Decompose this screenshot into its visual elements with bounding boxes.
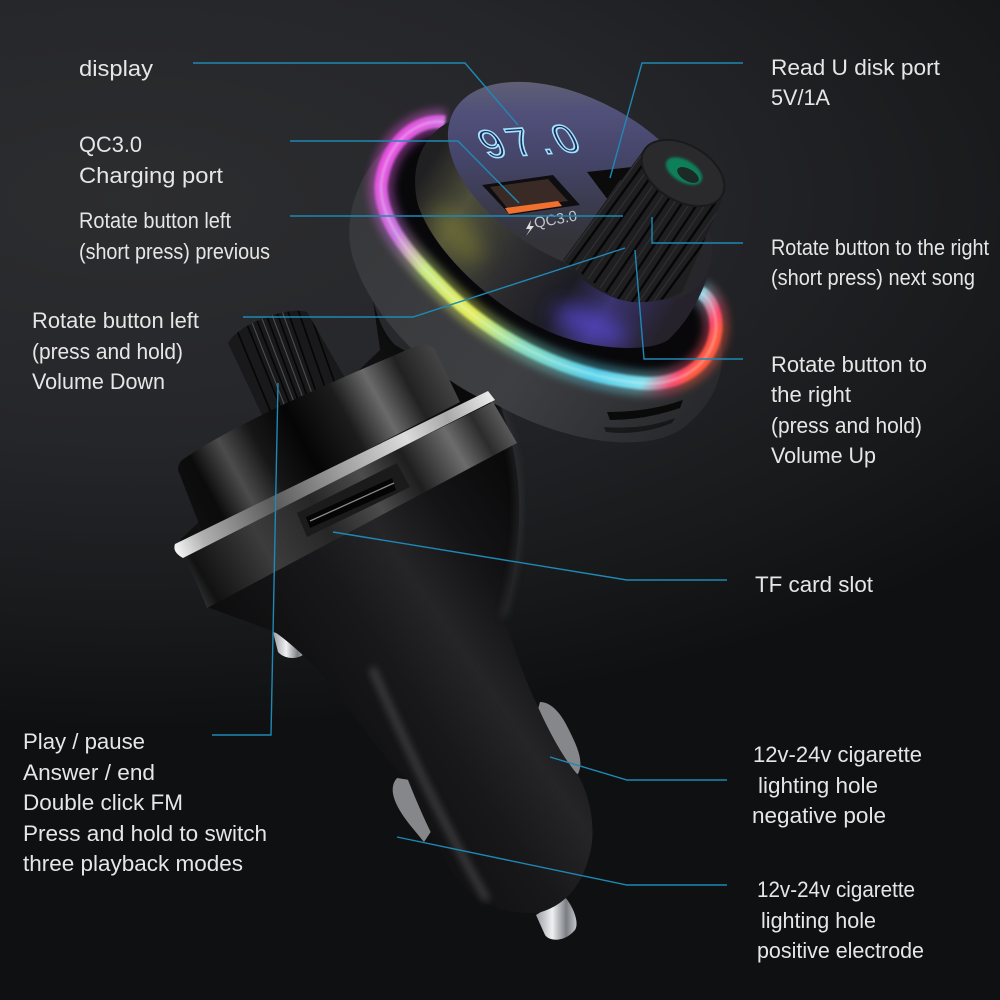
label: read u disk port bbox=[771, 55, 940, 110]
knob skirt bbox=[563, 180, 712, 300]
label: rotate button right hold bbox=[771, 352, 927, 468]
plug tip bbox=[536, 897, 577, 940]
rgb light ring bbox=[381, 122, 716, 383]
label: positive electrode: positive electrode bbox=[757, 938, 924, 963]
label: play pause bbox=[23, 729, 267, 876]
label: rotate button left hold: Rotate button left bbox=[32, 308, 199, 333]
illustration: lower charger head bbox=[174, 302, 517, 608]
label: rotate button right short press: (short press) next song bbox=[771, 265, 975, 290]
neck highlight bbox=[500, 408, 519, 617]
line: rotate right short bbox=[652, 217, 743, 243]
illustration: upper charger head bbox=[350, 82, 734, 442]
label: play pause: Double click FM bbox=[23, 790, 183, 815]
plug shell and neck bbox=[180, 300, 593, 913]
knob green icon bbox=[661, 151, 707, 191]
inner cylinder bbox=[415, 100, 712, 348]
side contact left bbox=[273, 632, 306, 658]
label: negative pole: 12v-24v cigarette bbox=[753, 742, 922, 767]
lower drum base bbox=[185, 402, 517, 608]
label: positive electrode: lighting hole bbox=[761, 908, 876, 933]
violet glow on cylinder bbox=[424, 199, 632, 351]
label: rotate button right hold: the right bbox=[771, 382, 851, 407]
line: negative pole bbox=[550, 757, 727, 780]
usb side slots bbox=[604, 400, 683, 433]
line: display bbox=[193, 63, 518, 125]
label: rotate button right hold: Volume Up bbox=[771, 443, 876, 468]
line: rotate right hold bbox=[635, 250, 743, 359]
second usb port bbox=[587, 167, 632, 200]
label: rotate button left short press: (short press) previous bbox=[79, 239, 270, 264]
line: tf card bbox=[333, 532, 727, 580]
leader lines bbox=[193, 63, 743, 885]
display face bbox=[415, 41, 741, 319]
negative spring contact bbox=[535, 702, 580, 774]
tf card slot bbox=[297, 463, 410, 537]
silver band bbox=[174, 391, 495, 558]
label: play pause: Press and hold to switch bbox=[23, 821, 267, 846]
label: play pause: three playback modes bbox=[23, 851, 243, 876]
positive spring contact bbox=[393, 778, 432, 842]
plug highlight bbox=[372, 668, 487, 900]
line: positive electrode bbox=[397, 837, 727, 885]
label: display: display bbox=[79, 56, 153, 81]
label: rotate button right hold: (press and hold) bbox=[771, 413, 922, 438]
label: play pause: Answer / end bbox=[23, 760, 155, 785]
label: negative pole: negative pole bbox=[752, 803, 886, 828]
label: read u disk port: 5V/1A bbox=[771, 85, 830, 110]
label: qc3.0 charging port bbox=[79, 132, 223, 188]
label: read u disk port: Read U disk port bbox=[771, 55, 940, 80]
label: negative pole: lighting hole bbox=[758, 773, 878, 798]
line: qc3.0 bbox=[290, 141, 519, 203]
illustration: plug body bbox=[180, 300, 593, 940]
line: read u disk port bbox=[610, 63, 743, 178]
label: rotate button left hold bbox=[32, 308, 199, 394]
label: play pause: Play / pause bbox=[23, 729, 145, 754]
label: rotate button left short press: Rotate button left bbox=[79, 208, 231, 233]
label: tf card slot: TF card slot bbox=[755, 572, 873, 597]
line: rotate left short bbox=[290, 215, 623, 217]
label: rotate button left hold: (press and hold) bbox=[32, 339, 183, 364]
line: play pause bbox=[212, 383, 278, 735]
label: positive electrode: 12v-24v cigarette bbox=[757, 877, 915, 902]
outer shell bbox=[349, 135, 722, 442]
lower drum top bbox=[178, 343, 460, 534]
lower knob bbox=[228, 310, 344, 414]
qc3.0 marking: QC3.0 bbox=[533, 208, 578, 232]
label: qc3.0 charging port: QC3.0 bbox=[79, 132, 142, 157]
label: negative pole bbox=[752, 742, 922, 828]
label: rotate button left hold: Volume Down bbox=[32, 369, 165, 394]
line: rotate left hold bbox=[243, 248, 625, 317]
qc3.0 usb port bbox=[482, 175, 580, 215]
label: rotate button left short press bbox=[79, 208, 270, 264]
display reading: 97.0 bbox=[469, 116, 594, 166]
label: rotate button right short press bbox=[771, 235, 989, 290]
rotary knob bbox=[563, 139, 726, 302]
label: rotate button right hold: Rotate button to bbox=[771, 352, 927, 377]
label: positive electrode bbox=[757, 877, 924, 963]
label: qc3.0 charging port: Charging port bbox=[79, 163, 223, 188]
